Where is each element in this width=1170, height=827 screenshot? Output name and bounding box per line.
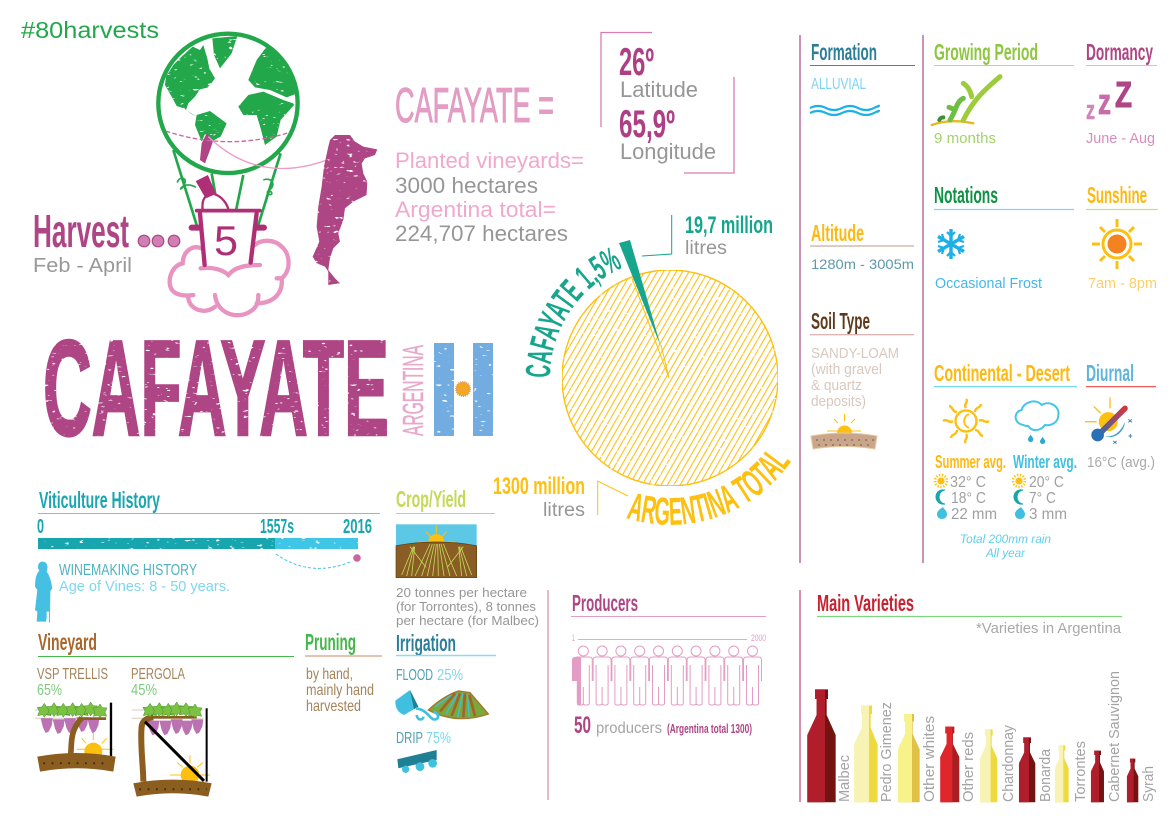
cloud bbox=[170, 241, 289, 315]
panel: pruning: mainly hand bbox=[306, 682, 374, 699]
variety labels: Syrah bbox=[1140, 766, 1157, 802]
variety labels: Malbec bbox=[836, 755, 853, 802]
vineyard area text: 3000 hectares bbox=[395, 173, 538, 198]
panel: irrigation: 75% bbox=[426, 730, 451, 747]
vineyard area text: Argentina total= bbox=[395, 197, 556, 222]
vineyard area text bbox=[395, 148, 584, 246]
panel: soil type: (with gravel bbox=[811, 361, 882, 378]
globe bbox=[158, 34, 298, 173]
coordinates box: Latitude bbox=[620, 77, 698, 102]
wine bucket with number bbox=[192, 211, 264, 265]
panel: viticulture history: WINEMAKING HISTORY bbox=[59, 562, 197, 579]
panel: vineyard bbox=[35, 629, 294, 797]
panel: formation: ALLUVIAL bbox=[811, 76, 866, 93]
Cafayate wedge bbox=[619, 240, 661, 347]
icon: soil and sun bbox=[811, 414, 877, 449]
icon: sleeping zzz: z bbox=[1098, 81, 1111, 122]
icon: sun bbox=[1092, 219, 1142, 269]
Argentina on globe bbox=[200, 133, 213, 163]
coordinates box: 26º bbox=[619, 41, 654, 84]
panel: vineyard: 65% bbox=[37, 682, 62, 699]
icon: sleeping zzz: z bbox=[1086, 95, 1095, 125]
timeline labels bbox=[37, 516, 372, 538]
harvest dots bbox=[138, 235, 180, 247]
icon: drip irrigation bbox=[397, 750, 437, 773]
rainfall note: Total 200mm rain bbox=[960, 534, 1051, 546]
curved label Cafayate: CAFAYATE 1,5% bbox=[526, 247, 622, 377]
coordinates box: Longitude bbox=[620, 139, 716, 164]
panel: soil type: SANDY-LOAM bbox=[811, 345, 899, 362]
panel: crop yield: per hectare (for Malbec) bbox=[396, 613, 539, 628]
panel: main varieties: Main Varieties bbox=[817, 590, 914, 616]
icon: thermometer bbox=[1085, 397, 1132, 444]
balloon ropes bbox=[173, 150, 281, 225]
curved label Argentina total: ARGENTINA TOTAL bbox=[626, 451, 791, 525]
bottle: Syrah bbox=[1127, 759, 1138, 802]
bottle: Other whites bbox=[898, 714, 920, 802]
country label: ARGENTINA bbox=[398, 345, 430, 436]
panel: main varieties bbox=[807, 590, 1157, 802]
panel: producers: producers bbox=[596, 720, 662, 737]
winter figures: Winter avg. bbox=[1013, 452, 1077, 472]
panel: pruning: Pruning bbox=[305, 629, 356, 655]
icon: rain cloud bbox=[1016, 401, 1058, 444]
pie chart bbox=[562, 240, 778, 486]
panel: soil type bbox=[810, 308, 914, 449]
panel: vineyard: Vineyard bbox=[38, 629, 97, 655]
panel: sunshine: 7am - 8pm bbox=[1088, 276, 1157, 292]
winter figures bbox=[1013, 452, 1077, 523]
panel: pruning bbox=[305, 629, 382, 715]
icon: VSP trellis bbox=[35, 702, 116, 772]
panel: crop yield: 20 tonnes per hectare bbox=[396, 585, 527, 600]
panel: climate bbox=[934, 360, 1077, 560]
coordinates box: 65,9º bbox=[619, 103, 675, 146]
producer scale: 1 bbox=[572, 633, 575, 643]
icon: water waves bbox=[810, 106, 879, 115]
icon: sleeping zzz: Z bbox=[1115, 74, 1132, 115]
timeline labels: 0 bbox=[37, 516, 44, 538]
panel: formation: Formation bbox=[811, 39, 877, 65]
summer figures: 32° C bbox=[950, 474, 986, 491]
panel: diurnal: 16°C (avg.) bbox=[1087, 455, 1155, 471]
balloon illustration bbox=[158, 34, 342, 225]
variety labels: Torrontes bbox=[1072, 741, 1089, 802]
variety labels: Chardonnay bbox=[1000, 725, 1017, 802]
Argentina volume callout bbox=[493, 473, 628, 521]
variety labels: Bonarda bbox=[1037, 748, 1054, 802]
variety labels bbox=[836, 671, 1157, 802]
panel: altitude: Altitude bbox=[811, 220, 864, 246]
bottle: Malbec bbox=[807, 689, 836, 802]
panel: sunshine bbox=[1086, 182, 1158, 292]
flag of Argentina bbox=[434, 343, 493, 436]
rainfall note bbox=[960, 534, 1051, 560]
hashtag: #80harvests bbox=[21, 17, 159, 43]
panel: irrigation bbox=[395, 630, 496, 773]
panel: soil type: & quartz bbox=[811, 377, 862, 394]
winter figures: 3 mm bbox=[1029, 506, 1067, 523]
panel: crop yield: (for Torrontes), 8 tonnes bbox=[396, 599, 536, 614]
variety labels: Other reds bbox=[960, 732, 977, 802]
producer scale: 2000 bbox=[751, 633, 766, 643]
producer scale bbox=[572, 633, 766, 643]
vineyard area text: Planted vineyards= bbox=[395, 148, 584, 173]
panel: irrigation: Irrigation bbox=[396, 630, 456, 656]
panel: climate: Continental - Desert bbox=[934, 360, 1070, 386]
panel: vineyard: PERGOLA bbox=[131, 666, 185, 683]
summer figures: 22 mm bbox=[951, 506, 997, 523]
Argentina volume callout: litres bbox=[543, 500, 585, 521]
pictogram of producers bbox=[572, 646, 762, 705]
panel: dormancy bbox=[1086, 39, 1157, 147]
Cafayate volume callout bbox=[642, 212, 773, 259]
winter figures: 20° C bbox=[1029, 474, 1064, 491]
panel: notations: Notations bbox=[934, 182, 998, 208]
panel: diurnal bbox=[1085, 360, 1156, 471]
panel: viticulture history: Age of Vines: 8 - 50 years. bbox=[59, 578, 230, 595]
Cafayate volume callout: litres bbox=[685, 238, 727, 259]
bottle: Pedro Gimenez bbox=[854, 706, 878, 802]
text: CAFAYATE bbox=[43, 312, 389, 464]
panel: producers: Producers bbox=[572, 590, 638, 616]
panel: altitude: 1280m - 3005m bbox=[811, 256, 914, 272]
panel: vineyard: 45% bbox=[131, 682, 157, 699]
panel: growing period bbox=[932, 39, 1074, 147]
icon: summer sun bbox=[943, 399, 989, 443]
panel: formation bbox=[810, 39, 915, 115]
rainfall note: All year bbox=[985, 548, 1026, 560]
summer figures: Summer avg. bbox=[935, 452, 1006, 472]
location connector bbox=[208, 137, 342, 168]
timeline marker bbox=[276, 554, 361, 568]
vineyard area text: 224,707 hectares bbox=[395, 221, 568, 246]
icon: flood irrigation bbox=[395, 690, 488, 719]
bottle: Torrontes bbox=[1055, 745, 1069, 802]
panel: altitude bbox=[810, 220, 914, 272]
panel: producers: (Argentina total 1300) bbox=[667, 721, 752, 736]
equation heading: CAFAYATE = bbox=[395, 79, 554, 133]
summer figures bbox=[935, 452, 1006, 523]
timeline bar bbox=[38, 538, 358, 549]
map of Argentina bbox=[313, 135, 377, 285]
Cafayate volume callout: 19,7 million bbox=[685, 212, 773, 239]
icon: snowflake bbox=[938, 229, 964, 259]
wine bottle bbox=[197, 177, 229, 211]
panel: growing period: 9 months bbox=[934, 130, 996, 147]
timeline labels: 1557s bbox=[260, 516, 294, 538]
bottle chart bbox=[807, 689, 1138, 802]
bottle: Cabernet Sauvignon bbox=[1091, 751, 1104, 802]
harvest heading: Harvest bbox=[33, 205, 129, 257]
bottle: Other reds bbox=[940, 727, 959, 802]
panel: pruning: harvested bbox=[306, 698, 361, 715]
panel: soil type: deposits) bbox=[811, 393, 866, 410]
panel: producers: 50 bbox=[574, 712, 591, 739]
bottle: Bonarda bbox=[1019, 737, 1035, 802]
panel: soil type: Soil Type bbox=[811, 308, 870, 334]
panel: growing period: Growing Period bbox=[934, 39, 1038, 65]
bottle: Chardonnay bbox=[980, 729, 997, 802]
panel: producers bbox=[571, 590, 766, 739]
panel: dormancy: June - Aug bbox=[1086, 130, 1155, 147]
panel: crop yield bbox=[396, 486, 539, 628]
icon: vineyard rows bbox=[396, 524, 477, 578]
variety labels: Cabernet Sauvignon bbox=[1106, 671, 1123, 802]
panel: notations: Occasional Frost bbox=[935, 276, 1042, 292]
panel: irrigation: FLOOD bbox=[396, 667, 433, 684]
panel: irrigation: 25% bbox=[437, 667, 463, 684]
variety labels: Pedro Gimenez bbox=[878, 702, 895, 802]
icon: sprouting vine bbox=[932, 77, 1000, 125]
panel: viticulture history bbox=[35, 487, 380, 623]
variety labels: Other whites bbox=[921, 716, 938, 802]
icon: pergola bbox=[132, 702, 212, 797]
panel: vineyard: VSP TRELLIS bbox=[37, 666, 108, 683]
icon: sleeping zzz bbox=[1086, 74, 1132, 125]
panel: pruning: by hand, bbox=[306, 666, 353, 683]
winter figures: 7° C bbox=[1029, 490, 1056, 507]
panel: main varieties: *Varieties in Argentina bbox=[976, 620, 1122, 637]
coordinates box bbox=[601, 32, 734, 173]
summer figures: 18° C bbox=[951, 490, 986, 507]
Argentina volume callout: 1300 million bbox=[493, 473, 585, 500]
panel: viticulture history: Viticulture History bbox=[39, 487, 160, 513]
panel: diurnal: Diurnal bbox=[1086, 360, 1134, 386]
harvest dates: Feb - April bbox=[33, 255, 132, 277]
wine bucket with number: 5 bbox=[214, 217, 238, 264]
panel: notations bbox=[934, 182, 1074, 292]
panel: crop yield: Crop/Yield bbox=[396, 486, 466, 512]
timeline labels: 2016 bbox=[343, 516, 372, 538]
icon: elderly woman bbox=[35, 562, 52, 623]
panel: irrigation: DRIP bbox=[396, 730, 423, 747]
